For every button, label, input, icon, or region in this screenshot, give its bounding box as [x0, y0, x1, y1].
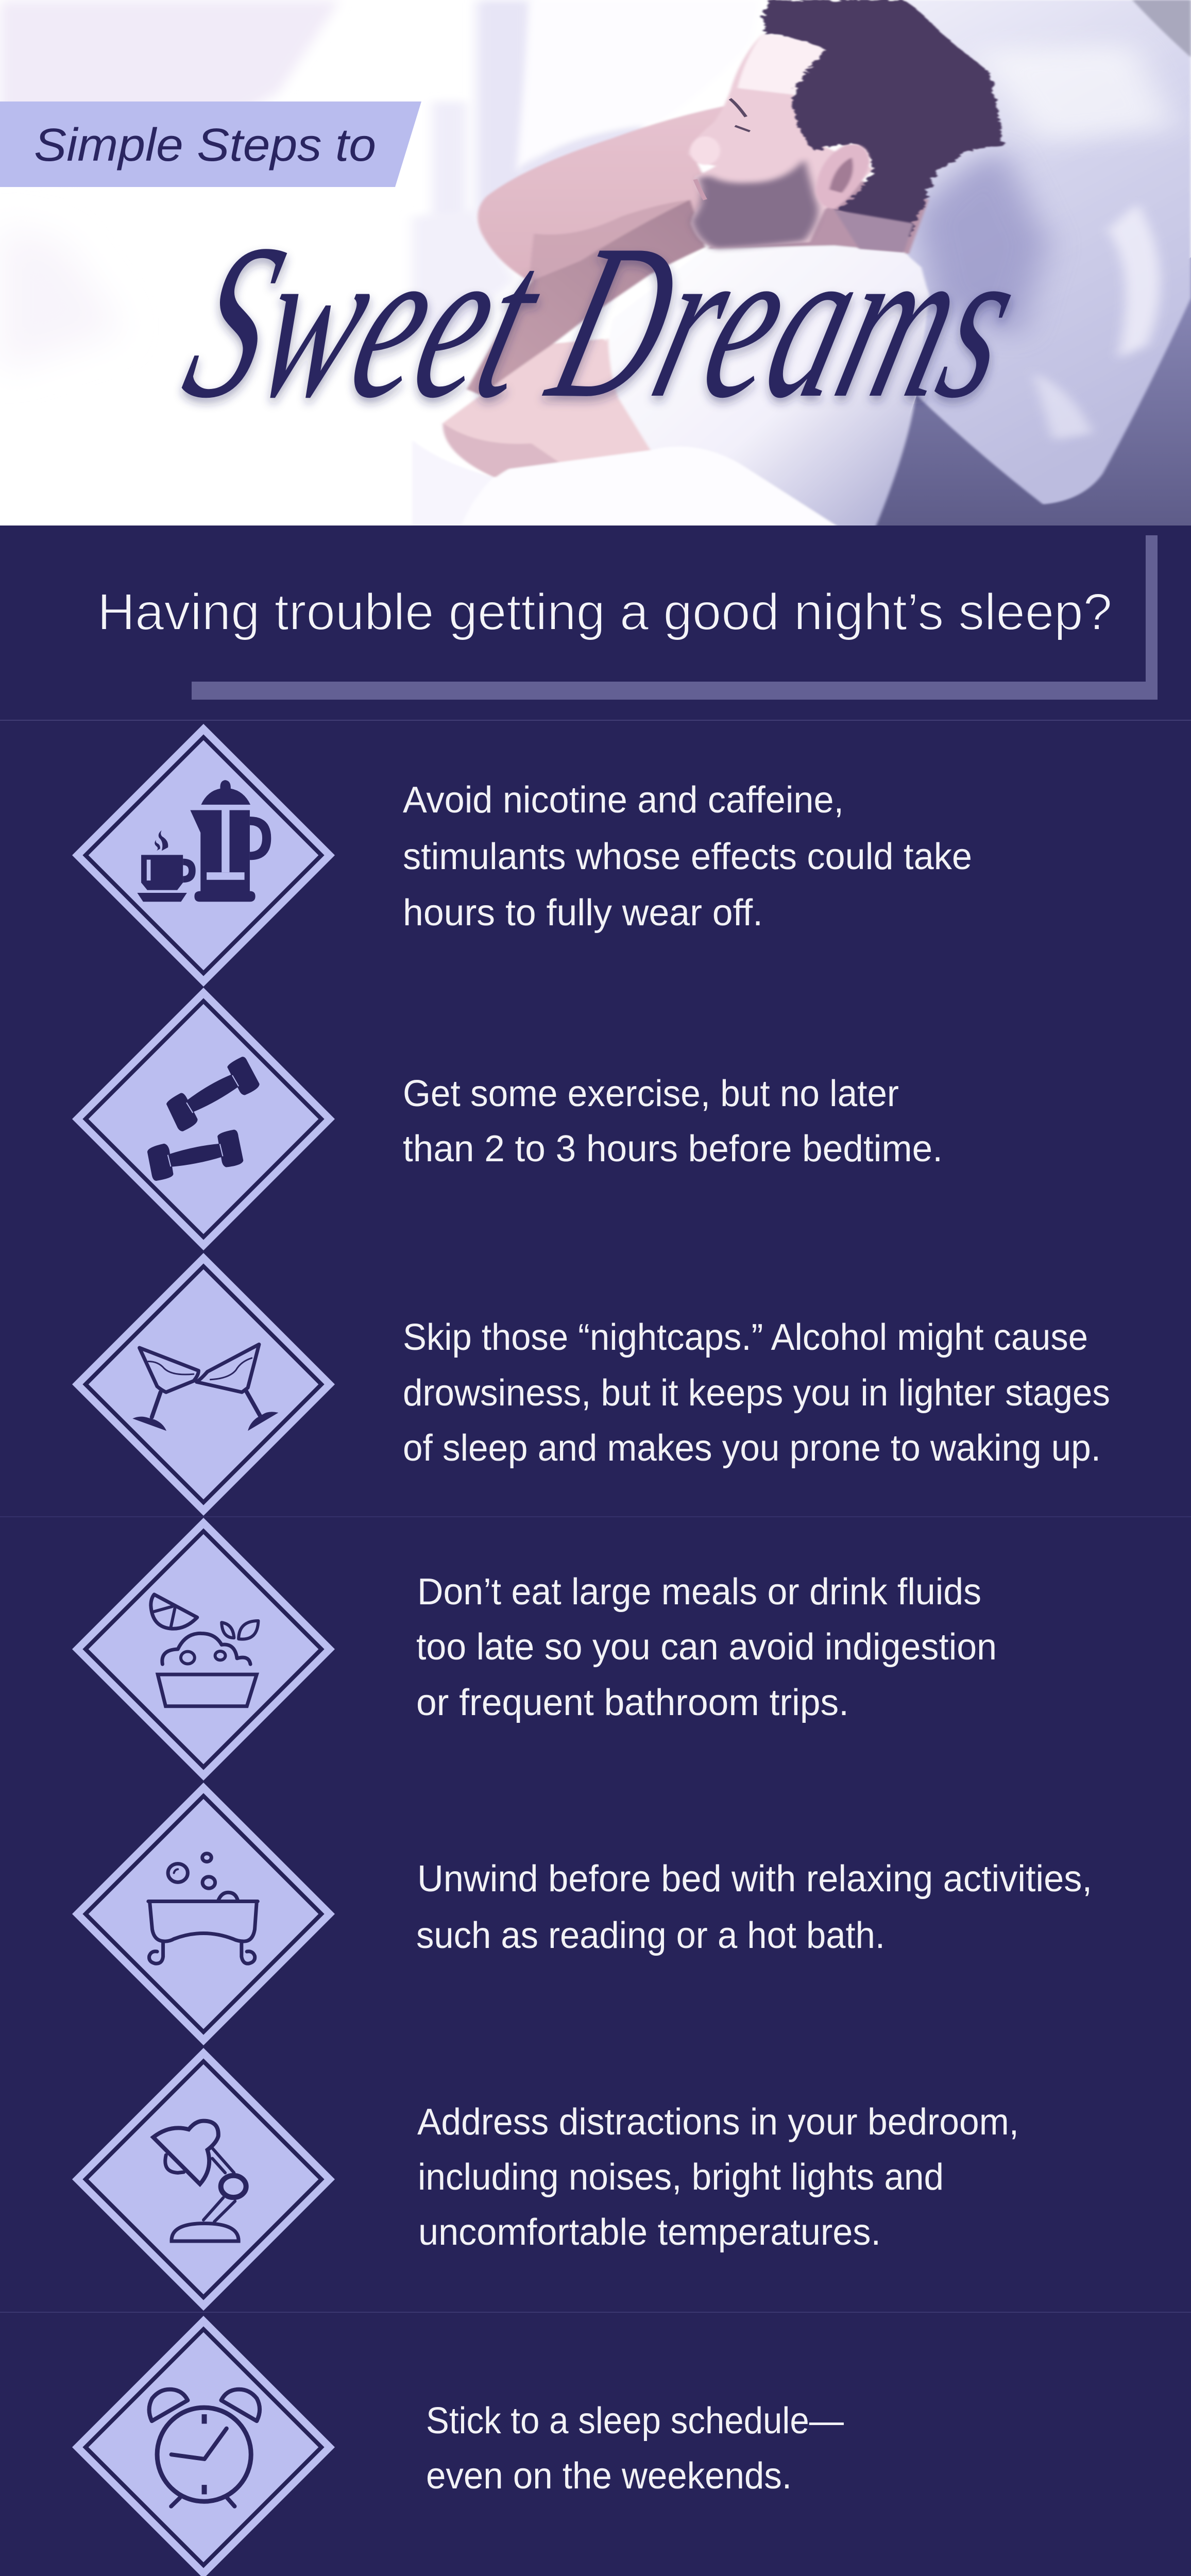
- tip 4 text: or frequent bathroom trips.: [416, 1682, 849, 1723]
- eyebrow and eyelash: [730, 99, 746, 117]
- tip 5 text: Unwind before bed with relaxing activities,: [417, 1858, 1092, 1900]
- tip 2: dumbbells icon: [72, 988, 335, 1250]
- tip 2 text: Get some exercise, but no later: [403, 1073, 899, 1114]
- tip 6 text: including noises, bright lights and: [418, 2157, 944, 2198]
- tip 6 text: [417, 2102, 1019, 2253]
- tip 7: alarm clock icon: [72, 2316, 335, 2576]
- face: [688, 34, 874, 249]
- tip 6: desk lamp icon: [72, 2048, 335, 2311]
- pillow: [904, 0, 1191, 504]
- tip 4 text: [416, 1571, 997, 1723]
- tip 1 text: Avoid nicotine and caffeine,: [403, 779, 844, 821]
- tip 1: coffee icon: [72, 724, 335, 987]
- beard: [691, 159, 818, 249]
- intro frame: [192, 535, 1158, 700]
- dark content panel: [0, 526, 1191, 2576]
- tip 5 text: [416, 1858, 1092, 1956]
- tip 4 text: too late so you can avoid indigestion: [416, 1626, 997, 1668]
- tip 6 text: uncomfortable temperatures.: [418, 2212, 881, 2253]
- separators: [0, 720, 1191, 2313]
- tip 5: bathtub icon: [72, 1783, 335, 2045]
- underside shadow below pillow: [869, 257, 1191, 531]
- tip 2 text: [403, 1073, 943, 1170]
- tip 1 text: hours to fully wear off.: [403, 892, 763, 934]
- blanket: [460, 446, 844, 531]
- tip 2 text: than 2 to 3 hours before bedtime.: [403, 1128, 943, 1170]
- t-shirt: [609, 245, 929, 531]
- forearm: [467, 200, 705, 398]
- neck: [705, 170, 929, 254]
- upper arm: [443, 338, 651, 477]
- tip 7 text: Stick to a sleep schedule—: [426, 2400, 844, 2442]
- tip 3 text: Skip those “nightcaps.” Alcohol might cause: [403, 1317, 1088, 1358]
- tip 3 text: of sleep and makes you prone to waking up.: [403, 1428, 1101, 1469]
- hair: [762, 0, 1003, 237]
- banner: Simple Steps to: [0, 101, 421, 187]
- tip 6 text: Address distractions in your bedroom,: [417, 2102, 1019, 2143]
- ear: [815, 144, 870, 209]
- tip 3: cocktail glasses icon: [72, 1253, 335, 1516]
- tip 3 text: drowsiness, but it keeps you in lighter stages: [403, 1372, 1110, 1414]
- banner: Simple Steps to: Simple Steps to: [34, 120, 376, 171]
- tip 7 text: even on the weekends.: [426, 2455, 792, 2497]
- heading: Having trouble: Having trouble getting a good night’s sleep?: [97, 583, 1112, 641]
- tip 1 text: [403, 779, 972, 934]
- man: [412, 34, 929, 531]
- tip 4: food bowl icon: [72, 1518, 335, 1781]
- tip 7 text: [426, 2400, 844, 2497]
- tip 1 text: stimulants whose effects could take: [403, 836, 972, 877]
- tip 3 text: [403, 1317, 1110, 1469]
- tip 4 text: Don’t eat large meals or drink fluids: [417, 1571, 981, 1613]
- tip 5 text: such as reading or a hot bath.: [416, 1915, 885, 1956]
- hero photo: man sleeping on white bedding: [0, 0, 1191, 531]
- near arm with hand on pillow: [478, 105, 730, 281]
